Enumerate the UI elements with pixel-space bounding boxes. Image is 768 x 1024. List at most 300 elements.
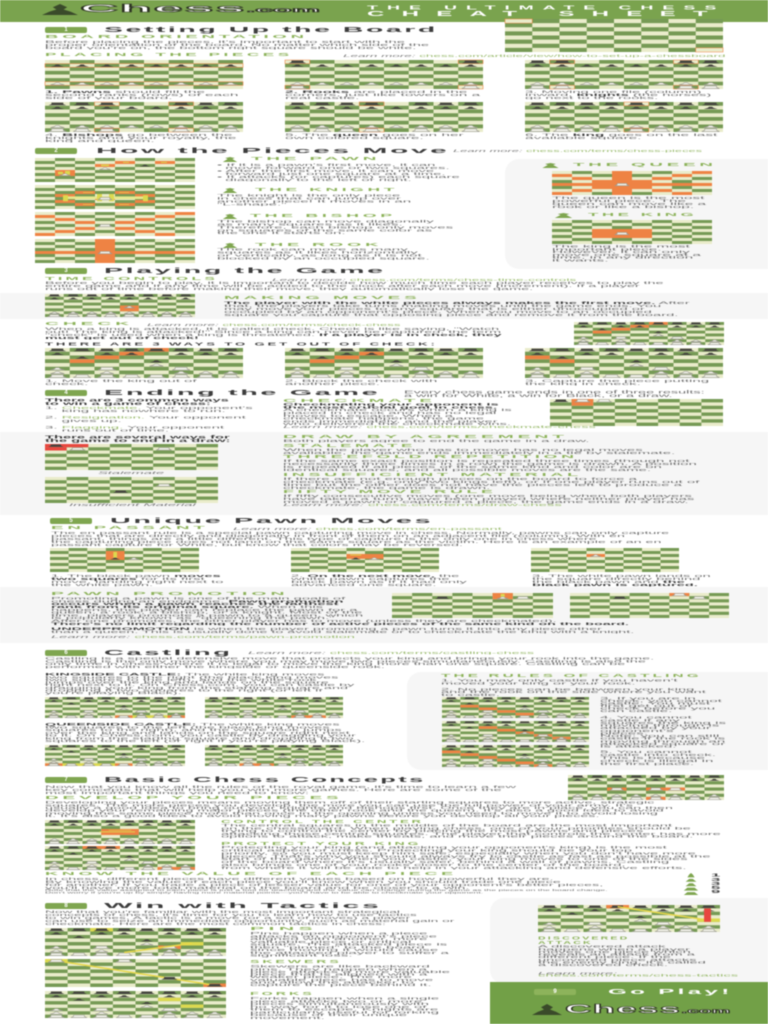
text: pawn promotion: rank from its original square. When this xyxy=(51,605,323,609)
text: underpromotion xyxy=(51,627,634,633)
list: ways to win: king has nowhere to run. xyxy=(62,409,226,413)
section 7: basic chess concepts xyxy=(0,770,768,895)
text: stalemate xyxy=(283,448,675,454)
badge 1: 1 xyxy=(64,27,68,33)
section 8: win with tactics xyxy=(0,895,768,1024)
gray band xyxy=(0,293,768,319)
text: pawn: forward just one square at a time. xyxy=(225,172,445,176)
section 3: playing the game xyxy=(0,266,768,386)
text: ways to draw: the game to end in a draw: xyxy=(45,438,230,443)
text: kingside castling: two squares to the right (the black king moves xyxy=(45,675,338,679)
board: promotion 1 xyxy=(392,593,553,618)
heading: skewers: SKEWERS xyxy=(250,959,342,964)
list: ways to win: 2. Resignation. Your opponent xyxy=(45,415,246,419)
numbers: piece values xyxy=(711,873,720,893)
text: pins xyxy=(250,932,449,957)
text: castling intro xyxy=(45,657,654,668)
text: queenside castling: QUEENSIDE CASTLE: The white king moves xyxy=(45,722,340,726)
text: en passant: pieces that are directly and diagonally in front of them on an adjacent file (column). With en xyxy=(51,534,625,538)
text: rule 5: This is because xyxy=(600,756,705,760)
text: castling intro: Castling is the only move where you may move two pieces simultaneously. Castling is also the xyxy=(45,659,646,663)
heading: Unique Pawn Moves xyxy=(110,516,433,524)
text: intro: Now that you know all the rules of the royal game, it's time to learn a few xyxy=(45,784,516,788)
subheading: insufficient material: INSUFFICIENT MATERIAL xyxy=(283,472,582,477)
text: intro: Every chess game ends in one of three results: xyxy=(404,389,705,394)
text: intro xyxy=(45,785,516,794)
text: fifty move rule xyxy=(283,494,694,506)
text: bishop: on squares of the same color as xyxy=(217,228,432,232)
text: rule 5: 5. You cannot xyxy=(600,750,692,754)
board: move king xyxy=(45,348,243,378)
text: intro: concepts of chess, it's time for you to learn how to use tactics xyxy=(45,912,417,916)
text: kingside castling: right next to it. On Chess.com, you can castle by xyxy=(45,683,354,687)
caption 5: 5. The queen goes on her xyxy=(285,132,464,136)
caption: another piece. xyxy=(285,382,380,386)
board: king xyxy=(524,101,724,134)
text: queenside castling: over the king and lands on the square right next xyxy=(45,730,350,734)
heading: discovered attack: ATTACK xyxy=(538,940,593,945)
caption 2: 2. Rooks are placed in the xyxy=(285,90,467,94)
panel: rules of castling xyxy=(407,672,768,770)
text: ways to win: to win a game of chess: xyxy=(45,401,211,406)
subheading: pawn promotion: PAWN PROMOTION xyxy=(51,591,288,596)
badge 6 xyxy=(45,650,87,656)
text: making moves: that, the players take turns making moves until the game ends. You xyxy=(224,304,661,308)
subheading: stalemate: STALEMATE xyxy=(283,443,416,448)
panel: queen and king xyxy=(505,159,768,269)
caption: stalemate: Stalemate xyxy=(98,470,164,474)
icons: piece values xyxy=(682,873,700,895)
badge 6: 6 xyxy=(64,650,68,656)
text: stalemate: available, the game ends immediately in a tie by stalemate. xyxy=(283,450,675,454)
board: skewer xyxy=(45,959,226,987)
text: orientation xyxy=(45,40,429,50)
subheading: draw by agreement: DRAW BY AGREEMENT xyxy=(283,434,568,439)
text: making moves: may move your pieces to any square that is either unoccupied or xyxy=(224,306,645,310)
text: rule 4: is attacked. xyxy=(600,744,676,748)
text: control the center xyxy=(221,824,721,838)
caption 1: 1. Pawns should fill the xyxy=(45,90,205,94)
text: rule 3: can castle. xyxy=(600,709,672,713)
text: rule 4: castle if the rook is xyxy=(600,736,725,740)
board: queen moves xyxy=(551,170,713,196)
badge 3 xyxy=(45,268,87,274)
text: queen xyxy=(552,196,706,209)
text: skewers: piece that is aligned with a xyxy=(250,972,427,976)
text: threefold repetition: If the same exact position is repeated three times (though not xyxy=(283,458,689,462)
text: rule 4: opponent's xyxy=(600,728,674,732)
subheading: know the value: KNOW THE VALUE OF EACH PIECE xyxy=(45,871,457,876)
text: en passant: passant capture for White, but know that colors may be reversed. xyxy=(51,542,463,546)
text: pawn promotion: time, players promote a pawn to a queen, which xyxy=(51,613,363,617)
heading: Win with Tactics xyxy=(104,901,381,909)
text: rule 4: moving through an xyxy=(600,739,725,743)
text: discovered attack: moves one piece which xyxy=(538,950,691,954)
board: pin xyxy=(45,928,226,956)
board: checkmate xyxy=(550,399,723,426)
board: queen xyxy=(284,101,484,134)
heading: the bishop: THE BISHOP xyxy=(250,213,396,218)
caption 6: available square. xyxy=(525,136,641,140)
caption: black pawn as if it had only xyxy=(291,580,467,584)
board: queenside after xyxy=(205,745,343,766)
text: value note: Don't worry if you're up by simply having more material points—you'll have to be able to checkmate your opponent. xyxy=(45,891,483,894)
text: threefold repetition: identical squares, and all possible moves are the same. xyxy=(283,468,651,472)
text: queenside castling: two squares to the left (the black king moves xyxy=(45,725,330,729)
text: queen: rook or like a bishop. xyxy=(552,204,694,208)
text: intro: to win games. A tactic is a move (or a set of moves) a player xyxy=(45,916,410,920)
subheading: control the center: CONTROL THE CENTER xyxy=(221,819,424,824)
caption: move, landing right next to xyxy=(51,580,223,584)
text: pins: square. The attacked piece is xyxy=(250,942,447,946)
heading: the king: THE KING xyxy=(588,212,697,217)
text: rook xyxy=(217,247,430,261)
caption: black pawn is captured. xyxy=(532,582,698,586)
text: king: move one square at a xyxy=(552,252,701,256)
go play text: Go Play! xyxy=(608,987,733,996)
text: time controls: Before you begin to play, it is important to decide how much time each player receives to play the xyxy=(45,280,664,284)
caption 4 xyxy=(45,132,236,144)
text: control the center: options to attack, make threats, and move their pieces around the board. xyxy=(221,834,693,838)
text: discovered attack xyxy=(538,945,706,966)
heading: Ending the Game xyxy=(104,388,380,396)
learn more link: Learn more: xyxy=(538,971,617,975)
text: check: must get out of check! xyxy=(45,336,199,340)
text: forks: movement. xyxy=(250,1016,325,1020)
text: value note xyxy=(45,889,607,894)
caption 1: second ranks (rows) of each xyxy=(45,92,238,96)
subheading: board orientation: BOARD ORIENTATION xyxy=(45,34,308,39)
learn more link: Learn more: chess.com/terms/check-chess xyxy=(147,322,401,326)
board: pawns xyxy=(44,59,244,90)
badge 2: 2 xyxy=(54,148,58,154)
text: checkmate: Checkmating your opponent is xyxy=(283,402,499,406)
text: develop: squares. The more pieces you develop, the more you can use the full power of your army. It's xyxy=(45,803,633,807)
text: value: In chess, different pieces have different values based on how powerful they are. xyxy=(45,876,553,880)
section 2: how the pieces move xyxy=(34,146,768,268)
text: discovered attack: happens when a player xyxy=(538,947,690,951)
board: control center xyxy=(45,820,195,844)
text: kingside castling xyxy=(45,673,354,694)
caption 5: own colored square. xyxy=(285,136,424,140)
heading: forks: FORKS xyxy=(250,991,315,996)
text: queen: powerful piece. The xyxy=(552,198,686,202)
text: develop: Developing your pieces means moving them off of their starting squares to more active, strategic xyxy=(45,800,654,804)
text: protect your king: also brings one of your rooks closer to the center of the board, xyxy=(221,862,625,866)
caption 6: 6. The king goes on the last xyxy=(525,132,717,136)
text: intro xyxy=(45,910,454,925)
text: ways to draw xyxy=(45,435,230,442)
text: pins: aligned with another, more xyxy=(250,937,427,941)
text: skewers xyxy=(250,965,450,986)
caption: the king in check. xyxy=(525,382,641,386)
text: queen: The queen is the most xyxy=(552,196,704,200)
list: ways to win: 1. Checkmate. Your opponent's xyxy=(45,406,253,410)
text: rook: or vertically, as long as it is not xyxy=(217,253,422,257)
text: checkmate: moves to escape. When a xyxy=(283,413,453,417)
text: time controls: entire game and if any time will be added to the clock after each move (increment). If a player xyxy=(45,284,640,288)
text: pawn: • It attacks (or captures) each square xyxy=(217,174,460,178)
text: intro: checkmate. Here are the most common tactics in chess: xyxy=(45,922,386,926)
board: block check xyxy=(285,348,483,378)
logo: Chess.com: Chess.com xyxy=(80,2,320,15)
gray band xyxy=(0,587,768,643)
learn more link: Learn more: chess.com/terms/chess-pieces xyxy=(453,148,702,152)
panel: go play xyxy=(490,982,768,1024)
text: pins: Pins happen when a piece xyxy=(250,931,427,935)
caption 2: real castle. xyxy=(285,96,359,100)
text: insufficient material: checkmate, the game is drawn. xyxy=(283,486,490,490)
badge 2 xyxy=(35,148,77,154)
heading: discovered attack: DISCOVERED xyxy=(538,935,629,941)
caption: 2. Block the check with xyxy=(285,378,437,382)
logo: Chess.com footer: Chess.com xyxy=(565,1002,730,1016)
text: discovered attack: a discovered check. xyxy=(538,963,668,967)
text: king: important piece. xyxy=(552,247,662,251)
text: checkmate: A checkmate occurs when a king is xyxy=(283,408,512,412)
learn more link: Learn more: chess.com/terms/chess-time-controls xyxy=(272,278,576,282)
subheading: protect your king: PROTECT YOUR KING xyxy=(221,841,421,846)
caption: 1. The black pawn moves xyxy=(51,574,221,578)
caption: two squares for its first xyxy=(51,576,205,580)
text: checkmate xyxy=(283,403,596,428)
text: knight: another piece! It moves in an xyxy=(217,199,411,203)
board: en passant step 1 xyxy=(50,548,199,572)
text: intro: most important things you need to know: xyxy=(45,790,309,794)
heading: Basic Chess Concepts xyxy=(104,775,426,783)
text: kingside castling: dragging your king from the starting square and xyxy=(45,685,348,689)
caption xyxy=(285,379,437,385)
list: ways to win xyxy=(45,406,253,432)
text: castling intro: only time in chess where it is legal to move the king more than one square. Castling can be xyxy=(45,662,625,666)
text: checkmate: checkmate happens, the game xyxy=(283,416,484,420)
caption 6 xyxy=(525,132,718,140)
text: value xyxy=(45,877,603,889)
text: queenside castling: king from the starting square and dropping it two xyxy=(45,736,354,740)
text: checkmate: the most crucial goal in chess. xyxy=(283,405,497,409)
text: castling intro: performed with either the kingside or queenside rook. xyxy=(45,664,385,668)
heading: How the Pieces Move xyxy=(96,146,449,154)
caption: insufficient material: Insufficient Material xyxy=(69,502,196,506)
subheading: making moves: MAKING MOVES xyxy=(224,295,421,300)
learn more link: Learn more: chess.com/terms/en-passant xyxy=(233,526,502,530)
text: develop: it. It's also a good idea to avoid moving many pawns before you develop all your pieces. xyxy=(45,814,599,818)
text: develop: usually a good idea to bring out your knights and bishops first. Once they are in place, you can then xyxy=(45,806,673,810)
text: queenside castling: squares to the right), and the white rook jumps xyxy=(45,728,342,732)
numbers: piece values: 1 xyxy=(711,872,720,878)
text: checkmate: Learn more: chess.com/terms/checkmate-chess xyxy=(283,425,596,429)
board: check xyxy=(574,322,724,345)
text: en passant: The en passant rule is a special pawn capturing move in chess. Normally, pawns can only capture xyxy=(51,530,669,534)
text: rook: squares as it likes horizontally xyxy=(217,250,418,254)
text: orientation: Before placing the pieces, it's important to start with the xyxy=(45,40,405,44)
text: pawn promotion continued: There's no limit regarding the number of active pieces of the same kind on the board. xyxy=(51,622,629,626)
text: draw by agreement: Both players agree to end the game in a draw. xyxy=(283,438,589,442)
badge 8 xyxy=(45,903,87,909)
numbers: piece values: 3 xyxy=(711,876,720,882)
text: check xyxy=(45,327,502,339)
text: king: time, in any direction xyxy=(552,255,693,259)
numbers: piece values: 3 xyxy=(711,880,720,886)
caption: 3. The white pawn lands on xyxy=(532,574,711,578)
text: kingside castling: you're playing Black). xyxy=(45,691,182,695)
text: rule 4: 4. You cannot xyxy=(600,715,692,719)
text: fifty move rule: have taken a turn) have been played where neither player has xyxy=(283,496,694,500)
text: pawn xyxy=(217,162,460,182)
text: rule 5: the first place. xyxy=(600,762,694,766)
text: rule 3: 3. If you are in xyxy=(600,696,696,700)
caption 4: knights and your royalty, the xyxy=(45,136,236,140)
text: forks: no way for it to lose one of xyxy=(250,1004,427,1008)
text: protect your king xyxy=(221,846,711,869)
badge 1 xyxy=(45,27,87,33)
text: skewers: and allow the attacker to xyxy=(250,980,414,984)
section 4: ending the game xyxy=(0,385,768,515)
badge 5 xyxy=(50,518,92,524)
subheading: threefold repetition: THREEFOLD REPETITION xyxy=(283,454,578,459)
text: rule 3: castle. You must xyxy=(600,701,710,705)
text: knight: The knight is the only piece xyxy=(217,193,400,197)
board: rook moves xyxy=(34,238,196,264)
icon: bishop xyxy=(222,213,238,220)
caption: the black pawn and the xyxy=(532,580,685,584)
text: knight: in chess that can jump over xyxy=(217,196,401,200)
text: king xyxy=(552,244,701,262)
caption 3 xyxy=(525,90,711,100)
board: first move xyxy=(45,294,195,317)
corner board xyxy=(504,18,724,53)
text: bishop: the one it starts on. xyxy=(217,231,346,235)
text: skewers: weaker piece. The more xyxy=(250,975,412,979)
text: en passant: the capturing piece does not land on the same square as the victim. Here is an example of an en xyxy=(51,540,661,544)
text: intro: a win for White, a win for Black, or a draw. xyxy=(404,393,672,398)
caption 5 xyxy=(285,132,464,140)
text: orientation: board you're on, the bottom right square should be white. xyxy=(45,46,416,50)
caption xyxy=(525,379,709,385)
board: discovered attack xyxy=(538,905,720,932)
badge 4: 4 xyxy=(64,390,68,396)
subheading: time controls: TIME CONTROLS xyxy=(45,276,218,281)
text: making moves: The player with the white pieces always makes the first move. After xyxy=(224,300,690,304)
text: pawn: • After the first move, it can move xyxy=(217,168,434,172)
text: intro: key concepts that will help you win more games. Here are some of the xyxy=(45,788,502,792)
text: pins: attacks an opponent's piece xyxy=(250,934,437,938)
caption 4: 4. Bishops go between the xyxy=(45,132,232,136)
text: pins: significant loss. xyxy=(250,953,353,957)
caption: 1. Move the king out of xyxy=(45,378,197,382)
text: time controls: runs out of time before making their move, they automatically lose the game. xyxy=(45,286,533,290)
caption 1: side of your board. xyxy=(45,96,173,100)
text: value: By knowing the value of each piece you'll know when you should trade one piece xyxy=(45,880,561,884)
badge 8: 8 xyxy=(64,903,68,909)
text: pins: then "pinned" to the board xyxy=(250,945,425,949)
board: king moves xyxy=(551,219,713,245)
subheading: three ways: THERE ARE 3 WAYS TO GET OUT OF CHECK: xyxy=(45,342,438,346)
numbers: piece values: 5 xyxy=(711,885,720,890)
section 6: castling xyxy=(0,645,768,770)
text: rule 4: pieces. xyxy=(600,731,648,735)
board: rule 3 xyxy=(442,697,589,718)
subheading: check: CHECK xyxy=(45,321,133,326)
text: rule 4: attacked square or xyxy=(600,742,725,746)
text: insufficient material: time but the other does not have the pieces left to produce a xyxy=(283,482,682,486)
text: rook: blocked by an occupied square. xyxy=(217,256,430,260)
text: threefold repetition: is repeated if all pieces of the same kind and color are on xyxy=(283,464,662,468)
text: rule 3: check, you cannot xyxy=(600,699,722,703)
learn more link: Learn more: chess.com/terms/castling-chess xyxy=(248,650,534,654)
text: rules 1 and 2: 2. No pieces can be between your king xyxy=(441,687,694,691)
text: bishop: as many squares as it likes. xyxy=(217,222,403,226)
text: bishop xyxy=(217,219,453,235)
board: knights xyxy=(524,59,724,90)
text: forks: particularly useful for forking xyxy=(250,1010,439,1014)
text: value: you'll have more total material on the board and be closer to a win. xyxy=(45,886,469,890)
board: stalemate xyxy=(45,444,218,470)
text: pins: the attacked player to suffer a xyxy=(250,950,449,954)
text: threefold repetition: necessarily three times in a row) the game is drawn. A position xyxy=(283,462,697,466)
heading: the pawn: THE PAWN xyxy=(251,156,380,161)
text: underpromotion: than a queen. This is usually done to avoid stalemate or to checkmate the king with a knight. xyxy=(51,630,634,634)
text: en passant: passant, things are a little different. This type of capture is the only one in chess where xyxy=(51,536,597,540)
caption 3: inward, knights (the horses) xyxy=(525,92,711,96)
text: kingside castling: two squares to the left), and the white rook xyxy=(45,678,317,682)
text: making moves: square you capture that opposing piece and remove it from the board. xyxy=(224,312,678,316)
subheading: the rules of castling: THE RULES OF CASTLING xyxy=(441,673,702,678)
text: protect your king: from where it will be able to help in your attacking and defensive efforts. xyxy=(221,865,686,869)
text: develop xyxy=(45,801,673,817)
text: fifty move rule: If fifty consecutive moves (one move being when both players xyxy=(283,494,692,498)
text: pawn promotion: happens, the player can replace the pawn for a xyxy=(51,607,357,611)
caption: 2. On the next move, the xyxy=(291,574,459,578)
text: making moves: occupied by an opponent's piece. When you move to an occupied xyxy=(224,310,652,314)
caption xyxy=(532,574,711,586)
text: discovered attack: different piece. If the xyxy=(538,955,671,959)
text: fifty move rule: moved a pawn or captured a piece, the game ends in a draw. xyxy=(283,500,689,504)
text: skewers: Skewers are like backward xyxy=(250,964,430,968)
text: protect your king: critical aspect of chess. Protecting your king should be your top xyxy=(221,848,632,852)
text: rule 4: attacked by your xyxy=(600,726,711,730)
text: protect your king: priority, so you must keep him safe, especially when you don't have more xyxy=(221,851,696,855)
text: develop: moving the same piece more than once in the opening unless you need to move it to avoid losing xyxy=(45,811,658,815)
badge 7: 7 xyxy=(64,777,68,783)
title: The Ultimate Chess Cheat Sheet: THE ULTIMATE CHESS xyxy=(367,5,725,11)
section 5: unique pawn moves xyxy=(0,515,768,645)
learn more link: chess.com/terms/chess-tactics xyxy=(538,973,738,977)
text: pawn: diagonally to the left or right. xyxy=(225,178,412,182)
gray band xyxy=(0,432,768,515)
text: intro: can use to seize an immediate opportunity, such as material gain or xyxy=(45,918,454,922)
subheading: en passant: EN PASSANT xyxy=(51,525,209,530)
badge 7 xyxy=(45,777,87,783)
text: value: for another. If you trade a piece of lesser value for one of your opponent's better pieces, xyxy=(45,882,603,886)
text: bishop: Therefore, each bishop only moves xyxy=(217,225,453,229)
text: skewers: piece attacks a more valuable xyxy=(250,970,450,974)
learn more link: Learn more: chess.com/article/view/how-to-set-up-a-chessboard xyxy=(343,54,725,58)
section: header banner xyxy=(0,0,768,22)
caption xyxy=(45,379,197,385)
text: rule 4: castle if any xyxy=(600,718,680,722)
caption 1 xyxy=(45,90,238,100)
text: check: When a king is attacked, it is called check. Check is like saying, "Watch xyxy=(45,326,499,330)
badge 9: 9 xyxy=(553,989,557,995)
text: orientation: proper orientation of the board. No matter which side of the xyxy=(45,42,429,46)
text: queen: queen can move like a xyxy=(552,202,706,206)
subheading: checkmate: CHECKMATE xyxy=(283,398,436,403)
text: pawn promotion: occurs when a pawn reaches the farthest xyxy=(51,602,339,606)
text: kingside castling: dropping it two squares to the right (or left if xyxy=(45,688,322,692)
text: pawn promotion continued xyxy=(51,619,629,625)
title: The Ultimate Chess Cheat Sheet: CHEAT SHEET xyxy=(367,9,725,18)
